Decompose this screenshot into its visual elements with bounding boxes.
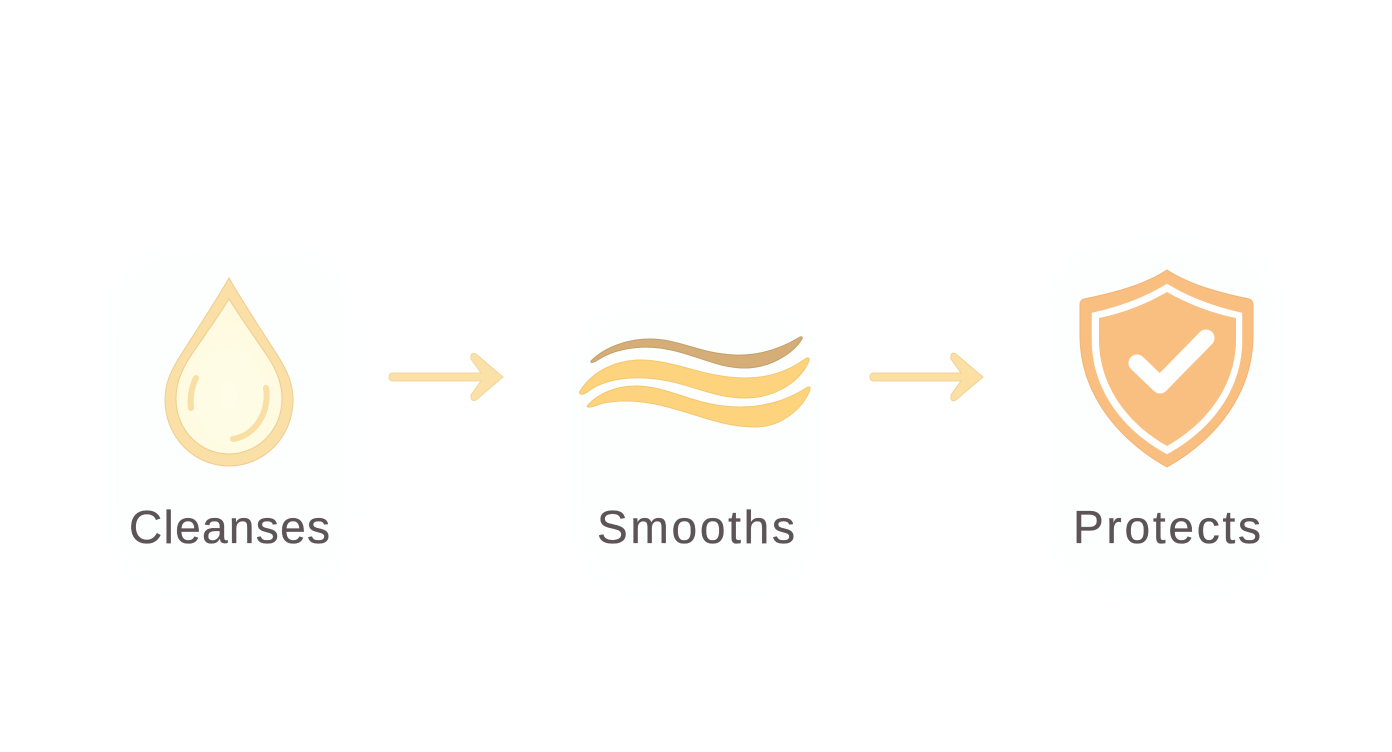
- wave: lower: [587, 386, 810, 427]
- arrow: cleanses to smooths: [389, 354, 503, 400]
- icon: water drop: [165, 278, 293, 466]
- highlight: right: [233, 388, 267, 439]
- wave: top: [591, 337, 802, 368]
- label: Smooths: Smooths: [597, 501, 795, 553]
- icon: waves: [580, 337, 810, 427]
- step: smooths: [575, 305, 815, 590]
- icon: shield with check: [1080, 270, 1253, 467]
- label: Cleanses: Cleanses: [129, 501, 330, 553]
- step: cleanses: [110, 250, 350, 590]
- label: Protects: Protects: [1073, 501, 1261, 553]
- wave: middle: [580, 358, 809, 398]
- check mark: [1137, 338, 1206, 385]
- arrow: smooths to protects: [870, 353, 983, 401]
- highlight: left: [191, 378, 196, 408]
- step: protects: [1045, 245, 1280, 590]
